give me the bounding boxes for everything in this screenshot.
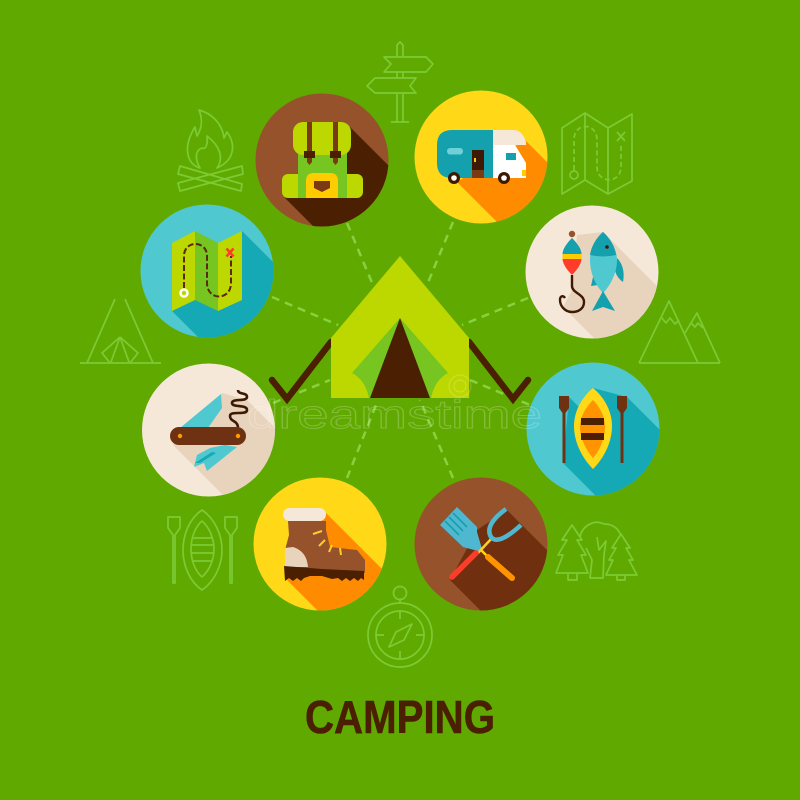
panel: grill tools circle [414, 478, 548, 610]
panel: camper van circle [414, 90, 548, 224]
icon: outline teepee [80, 299, 161, 363]
panel: backpack circle [256, 94, 388, 226]
title: CAMPING [305, 691, 495, 743]
panel: hiking boot circle [254, 478, 386, 610]
icon: outline mountains [639, 301, 720, 363]
watermark text [247, 375, 542, 437]
watermark text: dreamstime [247, 393, 542, 437]
panel: trail map circle [140, 204, 274, 338]
icon: outline forest [556, 522, 637, 580]
dashed connectors from tent to circles [272, 222, 530, 478]
icon: outline compass [368, 586, 432, 667]
panel: fishing circle [526, 206, 658, 338]
icon: outline signpost [367, 42, 433, 122]
icon: outline trail map [562, 113, 632, 194]
icon: outline campfire [178, 110, 243, 191]
panel: pocket knife circle [142, 364, 275, 496]
icon: outline canoe and paddles [168, 510, 237, 590]
illustration: central tent [272, 256, 528, 399]
panel: kayak circle [526, 362, 660, 496]
infographic canvas [80, 41, 721, 734]
